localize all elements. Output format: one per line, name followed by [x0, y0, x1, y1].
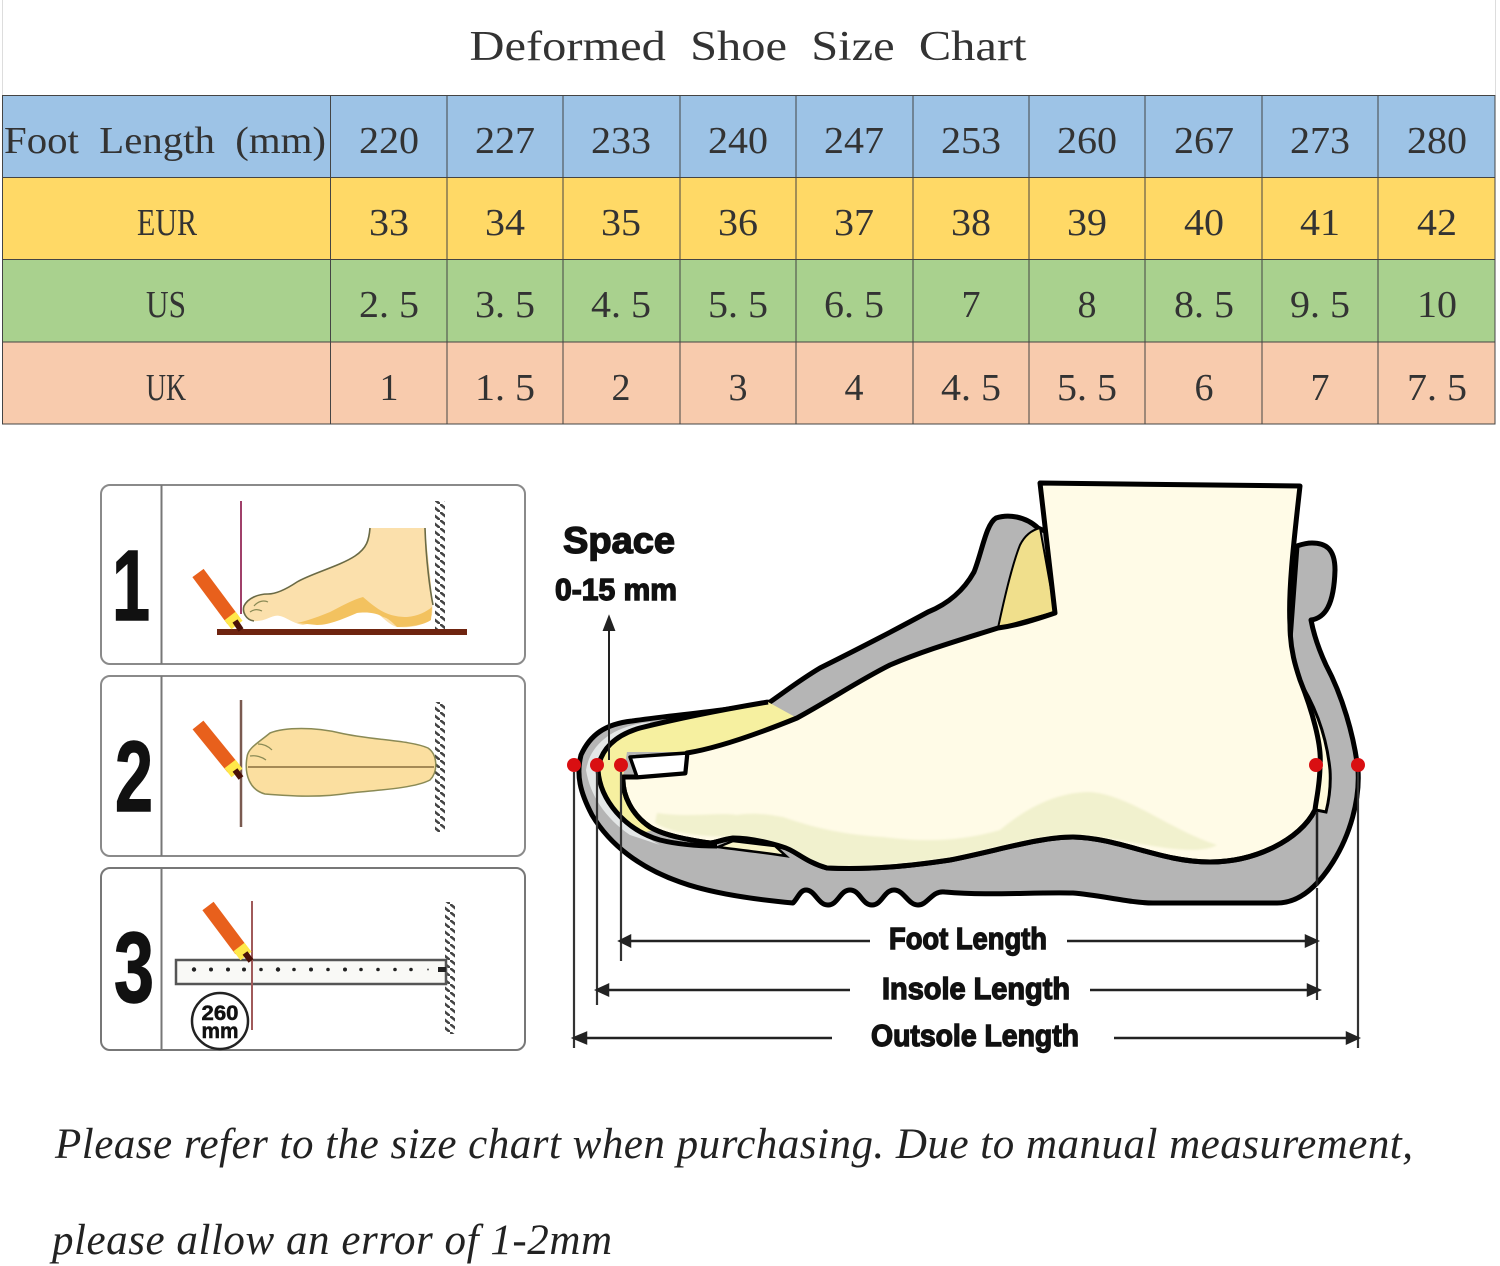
reading bubble 260 mm: 260 [202, 1002, 238, 1025]
row: UK: 2 [612, 367, 630, 409]
row: EUR: 40 [1184, 202, 1224, 244]
row: UK: 3 [728, 367, 748, 409]
row: UK: 1 [380, 367, 398, 409]
row: UK: 7. 5 [1407, 367, 1467, 409]
row: US: 7 [962, 284, 980, 326]
row: UK [2, 342, 1495, 424]
row: US: 2. 5 [359, 284, 419, 326]
toe space gap [630, 753, 687, 777]
Space label: 0-15 mm [555, 572, 677, 607]
arrow: space indicator [604, 617, 614, 760]
row: EUR: 38 [951, 202, 991, 244]
wall hatch [435, 702, 445, 832]
row: US: 6. 5 [824, 284, 884, 326]
panel: step 2 top view of foot [101, 676, 525, 856]
row: foot length: 260 [1057, 120, 1117, 162]
Space label: Space [563, 520, 675, 561]
label: insole length: Insole Length [882, 971, 1070, 1006]
row: foot length: 233 [591, 120, 651, 162]
row: US: 5. 5 [708, 284, 768, 326]
row: EUR: 41 [1300, 202, 1340, 244]
note text [49, 1121, 1413, 1264]
row: US: 8 [1078, 284, 1096, 326]
foot side view [243, 528, 433, 627]
row: US: 3. 5 [475, 284, 535, 326]
row: foot length: 227 [475, 120, 535, 162]
row: US: 9. 5 [1290, 284, 1350, 326]
row: foot length: 253 [941, 120, 1001, 162]
row: UK: 7 [1310, 367, 1330, 409]
shoe cross-section diagram [555, 483, 1365, 1053]
row: foot length: 247 [824, 120, 884, 162]
row: EUR: EUR [137, 202, 198, 244]
label: foot length: Foot Length [889, 921, 1047, 956]
step number 1: 1 [112, 530, 150, 642]
row: US: US [146, 284, 186, 326]
row: UK: 1. 5 [475, 367, 535, 409]
reading bubble 260 mm [192, 993, 248, 1049]
pencil [208, 906, 251, 961]
row: EUR [2, 178, 1495, 260]
panel: step 1 side view of foot [101, 485, 525, 664]
row: EUR: 39 [1067, 202, 1107, 244]
row: US: 8. 5 [1174, 284, 1234, 326]
pencil [198, 573, 241, 630]
Space label [555, 520, 677, 607]
row: EUR: 36 [718, 202, 758, 244]
panel: step 3 ruler reading [101, 868, 525, 1050]
measuring line [240, 700, 242, 827]
foot shape [623, 483, 1320, 869]
foot top view [246, 728, 436, 796]
row: UK: 6 [1194, 367, 1214, 409]
size chart table [2, 96, 1495, 424]
heel vertical seam [1316, 812, 1318, 886]
arrow: insole length [597, 985, 1319, 995]
wall hatch [435, 501, 445, 629]
row: foot length: 240 [708, 120, 768, 162]
row: UK: 4 [844, 367, 864, 409]
row: foot length: 220 [359, 120, 419, 162]
note text: Please refer to the size chart when purchasing. Due to manual measurement, [54, 1121, 1413, 1168]
step number 2: 2 [115, 721, 153, 833]
wall hatch [445, 902, 455, 1034]
arch insert [718, 841, 786, 856]
row: US: 4. 5 [591, 284, 651, 326]
measuring line [251, 901, 253, 1030]
row: US: 10 [1417, 284, 1457, 326]
toe lining gap [586, 722, 660, 845]
note text: please allow an error of 1-2mm [49, 1217, 612, 1264]
heel inner lining [1297, 677, 1330, 812]
row: EUR: 34 [485, 202, 525, 244]
foot sole shading [655, 792, 1217, 867]
row: foot length: 273 [1290, 120, 1350, 162]
ruler [176, 960, 446, 984]
measurement points [567, 758, 1365, 772]
row: UK: UK [146, 367, 186, 409]
step number 3: 3 [114, 912, 154, 1024]
row: foot length [2, 96, 1495, 178]
row: EUR: 37 [834, 202, 874, 244]
title: Deformed Shoe Size Chart [470, 24, 1027, 70]
arrow: foot length [620, 936, 1317, 946]
row: EUR: 42 [1417, 202, 1457, 244]
row: UK: 5. 5 [1057, 367, 1117, 409]
shoe body outline [579, 516, 1358, 905]
measuring line [240, 501, 242, 614]
label: outsole length: Outsole Length [871, 1018, 1079, 1053]
reading bubble 260 mm: mm [202, 1020, 238, 1043]
pencil [198, 725, 241, 778]
redraw foot outline bottom [623, 777, 1315, 869]
extension lines [574, 772, 1358, 1048]
row: EUR: 33 [369, 202, 409, 244]
row: EUR: 35 [601, 202, 641, 244]
ground line [217, 629, 467, 635]
arrow: outsole length [574, 1033, 1358, 1043]
ankle padding [998, 528, 1055, 628]
row: foot length: 267 [1174, 120, 1234, 162]
row: US [2, 260, 1495, 342]
toe-cap cushion [598, 702, 797, 832]
inner toe arc [598, 702, 768, 846]
row: foot length: Foot Length (mm) [4, 120, 326, 162]
row: foot length: 280 [1407, 120, 1467, 162]
row: UK: 4. 5 [941, 367, 1001, 409]
